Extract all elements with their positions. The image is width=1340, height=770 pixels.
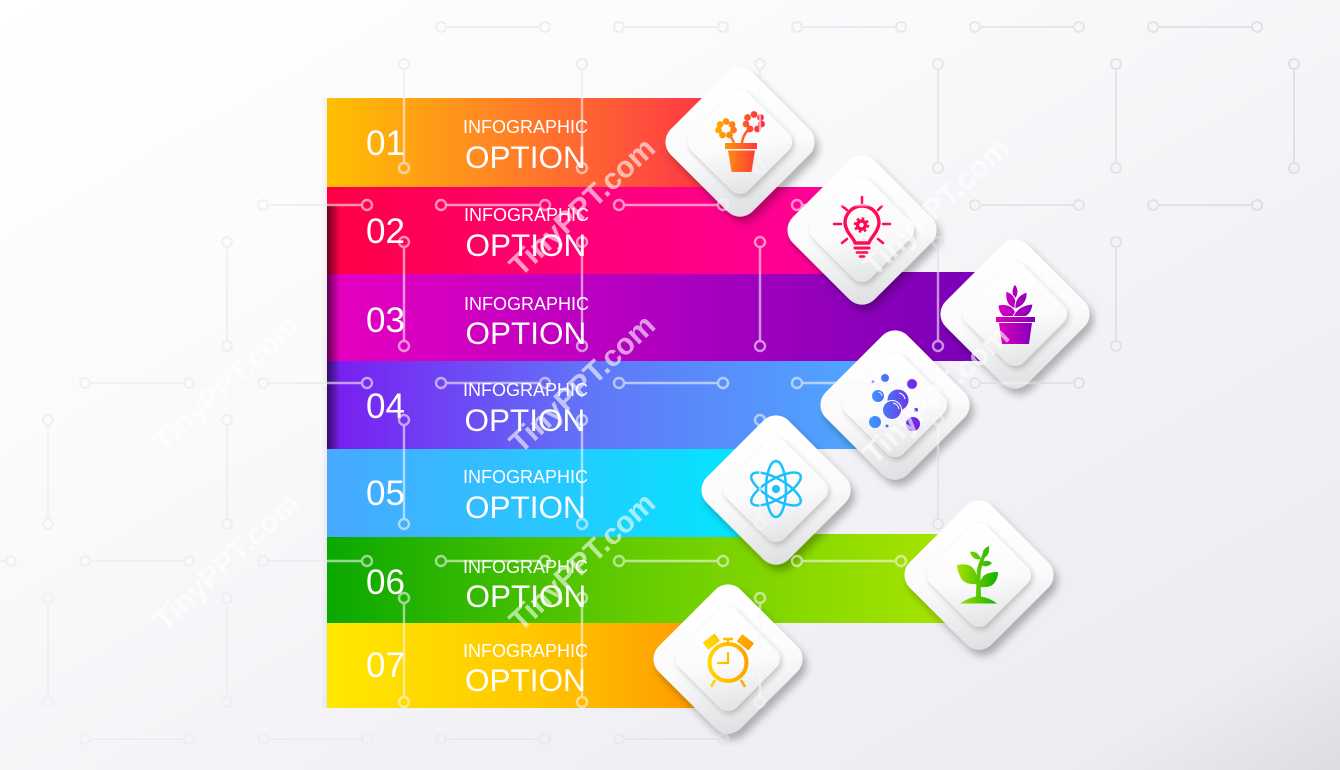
option 1 text [366,117,588,175]
option 5 text: INFOGRAPHIC [463,467,588,487]
icon: atom [747,461,805,517]
option 4 text: 04 [366,387,405,426]
option 7 text: INFOGRAPHIC [463,641,588,661]
tile 1 [658,60,822,224]
panel: diamond tiles [646,60,1097,741]
option 5 text: OPTION [465,489,586,525]
option 6 text [366,557,588,614]
watermarks: TinyPPT.com [147,309,306,460]
tile 2 [780,148,944,312]
tile 3 [933,232,1097,396]
option 3 text: INFOGRAPHIC [464,294,589,314]
option 5 text [366,467,588,525]
tile 5 [694,408,858,572]
option 7 text: OPTION [465,662,586,698]
bar 7 yellow [327,623,728,708]
watermarks: TinyPPT.com [503,309,662,460]
option 6 text: INFOGRAPHIC [463,557,588,577]
bar 6 green [327,534,979,623]
watermarks: TinyPPT.com [503,132,662,283]
option 3 text: OPTION [466,315,586,351]
watermarks: TinyPPT.com [147,487,306,638]
option 2 text [366,205,589,263]
option 1 text: INFOGRAPHIC [463,117,588,137]
panel: colour bars [321,98,1000,708]
option 1 text: OPTION [465,139,586,175]
icon: light bulb with gear [834,197,890,256]
bar 4 blue violet [327,361,895,449]
option 6 text: 06 [366,563,405,602]
option 1 text: 01 [366,124,405,163]
option 3 text: 03 [366,301,405,340]
icon: succulent in pot [996,284,1035,344]
tile 7 [646,577,810,741]
watermarks [147,132,1016,638]
watermarks: TinyPPT.com [857,132,1016,283]
icon: alarm clock [703,634,754,687]
icon: bubbles [869,374,920,431]
option 2 text: OPTION [466,227,586,263]
tile 6 [897,493,1061,657]
bar left edge shade [327,205,340,449]
icon: seedling [957,546,998,604]
watermarks: TinyPPT.com [857,320,1016,471]
bar 2 pink [327,187,862,274]
option 7 text: 07 [366,646,405,685]
icon: flower pot [715,111,765,172]
tile 4 [813,323,977,487]
bar left soft shadow [321,98,327,708]
bar 1 orange [327,98,740,187]
option 2 text: 02 [366,212,405,251]
option 4 text: INFOGRAPHIC [463,380,588,400]
bar 5 cyan [327,449,776,537]
option 4 text [366,380,588,438]
option 4 text: OPTION [464,402,585,438]
watermarks: TinyPPT.com [503,487,662,638]
bar 3 purple [327,272,1000,361]
option 2 text: INFOGRAPHIC [464,205,589,225]
option 3 text [366,294,589,351]
option 7 text [366,641,588,698]
option 5 text: 05 [366,474,405,513]
option 6 text: OPTION [466,578,586,614]
